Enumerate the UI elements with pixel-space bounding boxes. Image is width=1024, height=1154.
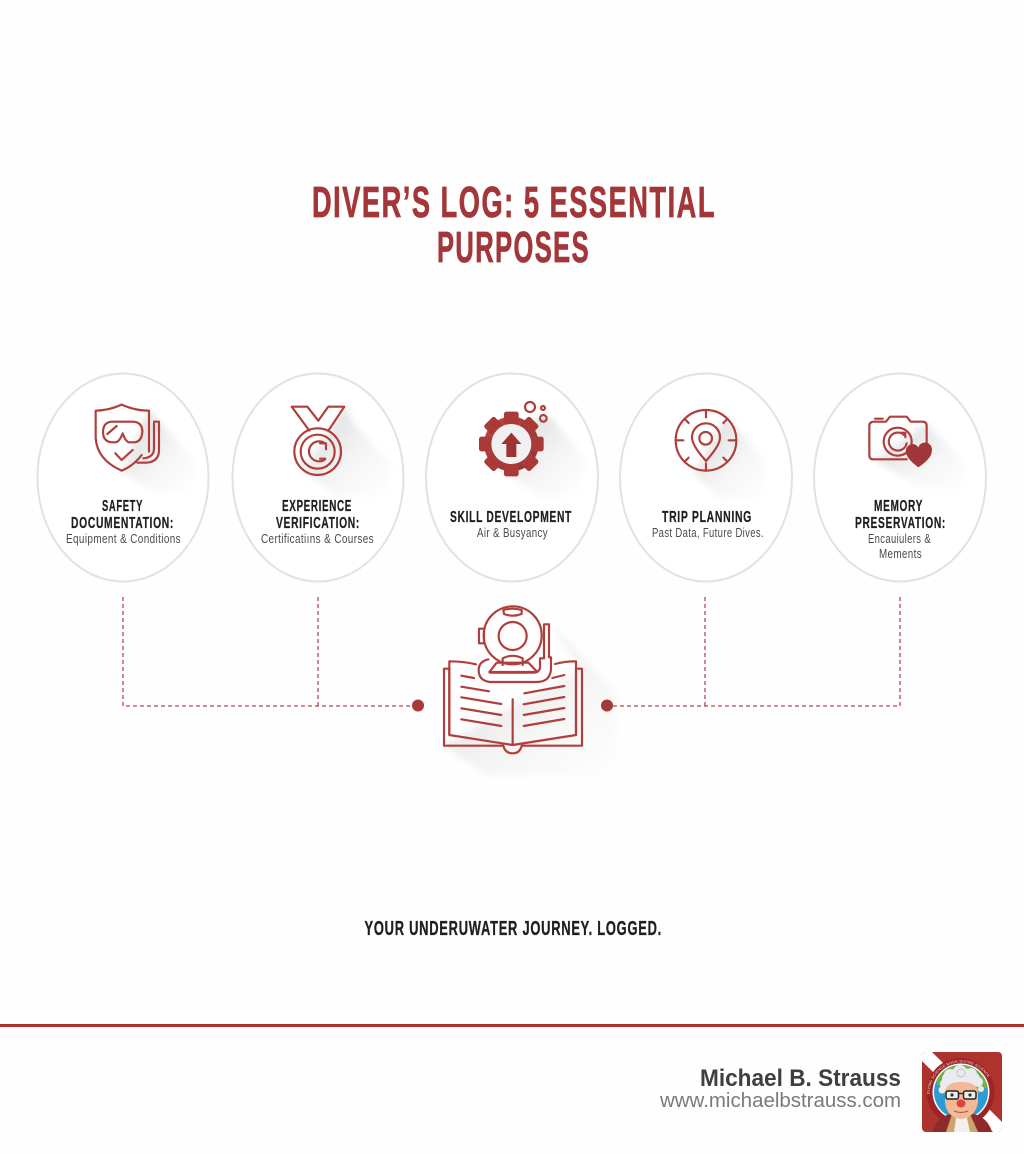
icon: open log book with dive helmet (443, 606, 617, 775)
author credit: Michael B. Strauss (700, 1065, 901, 1092)
label: trip planning: TRIP PLANNING (662, 509, 752, 526)
author credit: www.michaelbstrauss.com (659, 1090, 901, 1112)
node: left connector dot (412, 700, 424, 712)
panel: skill development (426, 374, 598, 582)
panel: safety documentation (38, 374, 208, 582)
label: experience verification: VERIFICATION: (276, 515, 360, 532)
icon: medal (292, 407, 393, 497)
label: memory preservation: MEMORY (874, 498, 923, 515)
label: skill development: Air & Busyancy (477, 525, 548, 540)
panel: memory preservation (814, 374, 986, 582)
label: skill development (450, 509, 572, 540)
label: safety documentation (66, 498, 181, 546)
connector: left dashed lines (123, 597, 412, 706)
label: memory preservation: Encauiulers & (868, 531, 931, 546)
label: trip planning: Past Data, Future Dives. (652, 525, 764, 540)
icon: camera with heart (869, 417, 967, 492)
title: DIVER’S LOG: 5 ESSENTIAL (312, 178, 716, 227)
label: memory preservation: PRESERVATION: (855, 515, 946, 532)
panel: trip planning (620, 374, 792, 582)
title: PURPOSES (437, 223, 590, 272)
title (312, 178, 716, 272)
connector: right dashed lines (613, 597, 900, 706)
icon: gear with arrow and bubbles (479, 402, 587, 498)
label: safety documentation: Equipment & Conditions (66, 531, 181, 546)
node: right connector dot (601, 700, 613, 712)
tagline: YOUR UNDERUWATER JOURNEY. LOGGED. (364, 917, 662, 940)
footer rule (0, 1024, 1024, 1027)
author credit (659, 1065, 901, 1112)
label: experience verification: EXPERIENCE (282, 498, 352, 515)
label: safety documentation: DOCUMENTATION: (71, 515, 174, 532)
label: experience verification (261, 498, 374, 546)
label: memory preservation: Mements (879, 546, 922, 561)
logo: author portrait badge: DIVING SCIENCE BOOK DIVING SCIENCE (927, 1060, 990, 1094)
label: memory preservation (855, 498, 946, 561)
portrait: face and hair (938, 1065, 984, 1119)
logo: author portrait badge (922, 1052, 1002, 1132)
portrait: shoulders and shirt (932, 1114, 992, 1132)
label: skill development: SKILL DEVELOPMENT (450, 509, 572, 526)
label: trip planning (652, 509, 764, 540)
icon: compass with location pin (676, 410, 767, 498)
panel: experience verification (232, 374, 404, 582)
label: experience verification: Certificatiıns & Courses (261, 531, 374, 546)
icon: shield with dive mask and snorkel (96, 405, 197, 492)
label: safety documentation: SAFETY (102, 498, 143, 515)
